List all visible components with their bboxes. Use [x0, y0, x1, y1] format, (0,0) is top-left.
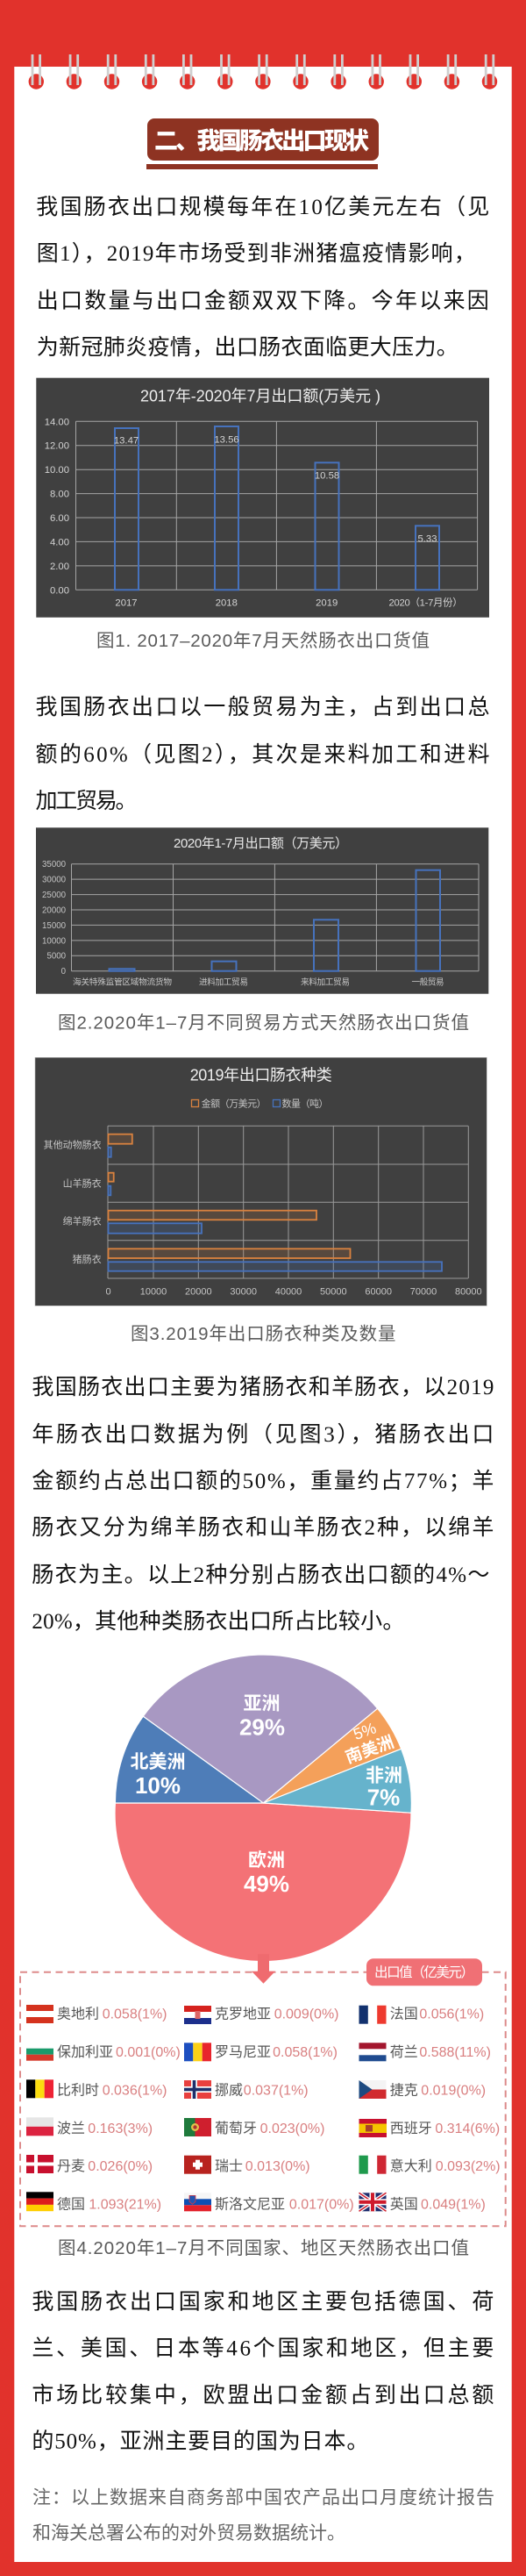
country: Czech Republic: 0.019(0%): [421, 2083, 486, 2099]
bar chart: 2019 casing types: 2019年出口肠衣种类: [190, 1067, 332, 1084]
text block: casing varieties: [32, 1375, 494, 1634]
country: Denmark: 丹麦: [57, 2158, 85, 2174]
bar chart: 2017-2020 export value: 8.00: [50, 490, 69, 500]
country: Spain: 西班牙: [390, 2121, 432, 2136]
country: Poland: 波兰: [57, 2121, 85, 2136]
text block: casing varieties: 年肠衣出口数据为例（见图3），猪肠衣出口: [32, 1422, 494, 1447]
bar chart: 2017-2020 export value: 12.00: [45, 441, 69, 452]
text block: casing varieties: 肠衣为主。以上2种分别占肠衣出口额的4%～: [32, 1563, 489, 1587]
bar chart: 2020 exports by trade mode: 2020年1-7月出口额（万美元）: [174, 836, 348, 851]
text block: destination markets: 市场比较集中，欧盟出口金额占到出口总额: [32, 2383, 494, 2408]
bar chart: 2019 casing types: 60000: [365, 1287, 392, 1298]
icon: notebook binding rings: [29, 54, 497, 89]
text block: destination markets: 兰、美国、日本等46个国家和地区，但主要: [32, 2336, 494, 2361]
badge: export value unit: [366, 1958, 482, 1986]
bar chart: 2017-2020 export value: 10.00: [45, 465, 69, 476]
bar chart: 2017-2020 export value: [36, 378, 489, 618]
bar chart: 2020 exports by trade mode: 进料加工贸易: [199, 976, 248, 987]
bar chart: 2020 exports by trade mode: 30000: [42, 876, 67, 884]
pie chart: export share by region: [115, 1655, 411, 1962]
country: Poland: [26, 2117, 153, 2136]
country: Portugal: [184, 2118, 324, 2136]
bar chart: 2017-2020 export value: 2018: [216, 598, 238, 609]
text block: trade modes: [35, 695, 489, 813]
bar chart: 2017-2020 export value: 5.33: [417, 534, 437, 545]
country: Netherlands: 0.588(11%): [419, 2045, 491, 2060]
chart legend: 数量（吨）: [282, 1098, 328, 1109]
text block: casing varieties: 20%，其他种类肠衣出口所占比较小。: [32, 1609, 404, 1634]
country: Croatia: 克罗地亚: [215, 2006, 271, 2021]
text block: casing varieties: 金额约占总出口额的50%，重量约占77%；羊: [32, 1469, 494, 1493]
bar chart: 2017-2020 export value: 10.58: [315, 471, 339, 482]
text block: export scale: 图1），2019年市场受到非洲猪瘟疫情影响，: [37, 241, 476, 266]
bar chart: 2019 casing types: 50000: [320, 1287, 347, 1298]
pie label: Asia: 亚洲: [244, 1693, 281, 1714]
text block: trade modes: 加工贸易。: [35, 789, 137, 813]
pie label: Africa: [366, 1765, 402, 1811]
bar chart: 2017-2020 export value: 2020（1-7月份）: [389, 597, 463, 609]
pie label: Europe: [244, 1850, 289, 1897]
country: Belgium: 比利时: [57, 2083, 99, 2099]
country: Italy: 0.093(2%): [436, 2159, 501, 2174]
bar chart: 2020 exports by trade mode: 10000: [42, 936, 67, 946]
country: Netherlands: 荷兰: [390, 2044, 418, 2060]
bar chart: 2020 exports by trade mode: 来料加工贸易: [301, 976, 350, 987]
bar chart: 2020 exports by trade mode: 35000: [42, 860, 67, 869]
caption: figure 3: 图3.2019年出口肠衣种类及数量: [131, 1324, 396, 1344]
bar chart: 2019 casing types: 20000: [185, 1287, 212, 1298]
country: Switzerland: 瑞士: [215, 2158, 243, 2174]
country: Belgium: [26, 2079, 167, 2099]
country: Germany: [26, 2192, 161, 2213]
country: France: [359, 2006, 484, 2024]
bar chart: 2017-2020 export value: 2019: [316, 598, 338, 609]
heading: section title: 二、我国肠衣出口现状: [154, 127, 369, 154]
country: Austria: 奥地利: [57, 2006, 99, 2021]
bar chart: 2020 exports by trade mode: 0: [61, 967, 67, 977]
country: Croatia: [184, 2006, 339, 2024]
bar chart: 2019 casing types: 70000: [410, 1287, 437, 1298]
bar chart: 2017-2020 export value: 14.00: [45, 417, 69, 427]
bar chart: 2020 exports by trade mode: [36, 827, 488, 994]
bar chart: 2020 exports by trade mode: 20000: [42, 905, 67, 915]
text block: casing varieties: 我国肠衣出口主要为猪肠衣和羊肠衣，以2019: [32, 1375, 494, 1399]
country: Romania: 0.058(1%): [273, 2045, 338, 2060]
badge: export value unit: 出口值（亿美元）: [374, 1964, 474, 1980]
country: Romania: 罗马尼亚: [215, 2044, 271, 2060]
pie label: Europe: 49%: [244, 1871, 289, 1897]
text block: destination markets: [32, 2290, 494, 2454]
country: Slovenia: 0.017(0%): [289, 2197, 354, 2213]
country: Bulgaria: 0.001(0%): [116, 2045, 181, 2060]
bar chart: 2019 casing types: 10000: [140, 1287, 167, 1298]
country: Italy: 意大利: [390, 2157, 432, 2174]
country: Austria: 0.058(1%): [103, 2007, 167, 2021]
country: United Kingdom: 英国: [390, 2197, 418, 2213]
text block: trade modes: 额的60%（见图2），其次是来料加工和进料: [35, 742, 489, 767]
country: France: 法国: [390, 2006, 418, 2021]
bar chart: 2019 casing types: 山羊肠衣: [63, 1177, 102, 1190]
country: Germany: 德国: [57, 2197, 85, 2213]
country: France: 0.056(1%): [419, 2007, 484, 2021]
pie label: North America: 10%: [135, 1772, 181, 1799]
country: Bulgaria: 保加利亚: [57, 2044, 113, 2060]
pie label: Africa: 非洲: [366, 1765, 402, 1786]
bar chart: 2020 exports by trade mode: 海关特殊监管区域物流货物: [73, 976, 172, 987]
country: Slovenia: 斯洛文尼亚: [215, 2197, 285, 2213]
country: Spain: [359, 2119, 500, 2137]
pie label: Asia: 29%: [239, 1714, 285, 1741]
text block: data source note: 注：以上数据来自商务部中国农产品出口月度统计报告: [32, 2488, 494, 2508]
text block: data source note: 和海关总署公布的对外贸易数据统计。: [32, 2523, 345, 2544]
text block: trade modes: 我国肠衣出口以一般贸易为主，占到出口总: [35, 695, 489, 719]
bar chart: 2017-2020 export value: 13.47: [114, 436, 139, 447]
caption: figure 4: 图4.2020年1–7月不同国家、地区天然肠衣出口值: [58, 2238, 469, 2258]
pie label: North America: 北美洲: [130, 1752, 186, 1772]
country: Denmark: 0.026(0%): [88, 2159, 153, 2174]
heading: section title: [146, 118, 379, 169]
bar chart: 2017-2020 export value: 13.56: [214, 435, 239, 446]
country: Croatia: 0.009(0%): [274, 2007, 339, 2021]
country: Poland: 0.163(3%): [88, 2122, 153, 2136]
bar chart: 2020 exports by trade mode: 5000: [46, 952, 67, 962]
bar chart: 2017-2020 export value: 2017: [115, 598, 138, 609]
pie label: Africa: 7%: [367, 1785, 400, 1811]
text block: casing varieties: 肠衣又分为绵羊肠衣和山羊肠衣2种，以绵羊: [32, 1515, 494, 1540]
chart legend: [191, 1097, 328, 1109]
text block: export scale: 我国肠衣出口规模每年在10亿美元左右（见: [36, 195, 489, 219]
country: Switzerland: [184, 2156, 310, 2174]
bar chart: 2020 exports by trade mode: 一般贸易: [412, 976, 444, 987]
country: Norway: 0.037(1%): [244, 2083, 309, 2099]
country: Slovenia: [184, 2193, 354, 2213]
caption: figure 1: 图1. 2017–2020年7月天然肠衣出口货值: [96, 631, 430, 651]
pie label: Asia: [239, 1693, 285, 1741]
text block: export scale: [36, 195, 489, 360]
bar chart: 2017-2020 export value: 2.00: [50, 562, 69, 572]
text block: data source note: [32, 2488, 494, 2544]
country: Germany: 1.093(21%): [89, 2197, 161, 2213]
bar chart: 2019 casing types: 40000: [275, 1287, 302, 1298]
bar chart: 2019 casing types: [35, 1057, 487, 1306]
country: United Kingdom: [359, 2193, 486, 2213]
country: Netherlands: [359, 2043, 491, 2061]
country: Norway: [184, 2080, 309, 2099]
country: Austria: [26, 2005, 167, 2023]
bar chart: 2019 casing types: 80000: [455, 1287, 482, 1298]
panel: European country list: [20, 1954, 506, 2226]
country: United Kingdom: 0.049(1%): [421, 2197, 486, 2213]
text block: destination markets: 的50%，亚洲主要目的国为日本。: [32, 2429, 368, 2454]
country: Switzerland: 0.013(0%): [245, 2159, 310, 2174]
country: Portugal: 葡萄牙: [215, 2121, 257, 2136]
arrow: pie to list: [252, 1954, 275, 1984]
bar chart: 2019 casing types: 0: [105, 1287, 111, 1298]
country: Czech Republic: 捷克: [390, 2083, 418, 2099]
bar chart: 2019 casing types: 30000: [230, 1287, 257, 1298]
bar chart: 2020 exports by trade mode: 25000: [42, 891, 67, 900]
text block: destination markets: 我国肠衣出口国家和地区主要包括德国、荷: [32, 2290, 494, 2315]
bar chart: 2019 casing types: 其他动物肠衣: [44, 1139, 102, 1151]
country: Italy: [359, 2156, 501, 2174]
bar chart: 2017-2020 export value: 2017年-2020年7月出口额(万美元 ): [140, 388, 380, 405]
text block: export scale: 出口数量与出口金额双双下降。今年以来因: [37, 289, 489, 313]
bar chart: 2017-2020 export value: 4.00: [50, 537, 69, 547]
country: Belgium: 0.036(1%): [103, 2083, 167, 2099]
country: Portugal: 0.023(0%): [260, 2122, 324, 2136]
pie label: South America: [337, 1715, 396, 1768]
bar chart: 2019 casing types: 猪肠衣: [73, 1253, 102, 1265]
country: Norway: 挪威: [215, 2083, 243, 2099]
pie label: South America: 5%: [351, 1719, 379, 1743]
country: Romania: [184, 2043, 338, 2061]
country: Bulgaria: [26, 2043, 181, 2061]
country: Czech Republic: [359, 2080, 486, 2099]
pie label: South America: 南美洲: [343, 1732, 396, 1768]
bar chart: 2017-2020 export value: 6.00: [50, 513, 69, 524]
country: Denmark: [26, 2155, 153, 2174]
chart legend: 金额（万美元）: [202, 1097, 267, 1109]
pie label: Europe: 欧洲: [248, 1850, 285, 1871]
bar chart: 2020 exports by trade mode: 15000: [42, 921, 67, 931]
caption: figure 2: 图2.2020年1–7月不同贸易方式天然肠衣出口货值: [58, 1013, 469, 1034]
country: Spain: 0.314(6%): [435, 2122, 500, 2136]
text block: export scale: 为新冠肺炎疫情，出口肠衣面临更大压力。: [37, 335, 458, 360]
pie label: North America: [130, 1752, 186, 1799]
bar chart: 2017-2020 export value: 0.00: [50, 585, 69, 596]
bar chart: 2019 casing types: 绵羊肠衣: [63, 1214, 102, 1227]
